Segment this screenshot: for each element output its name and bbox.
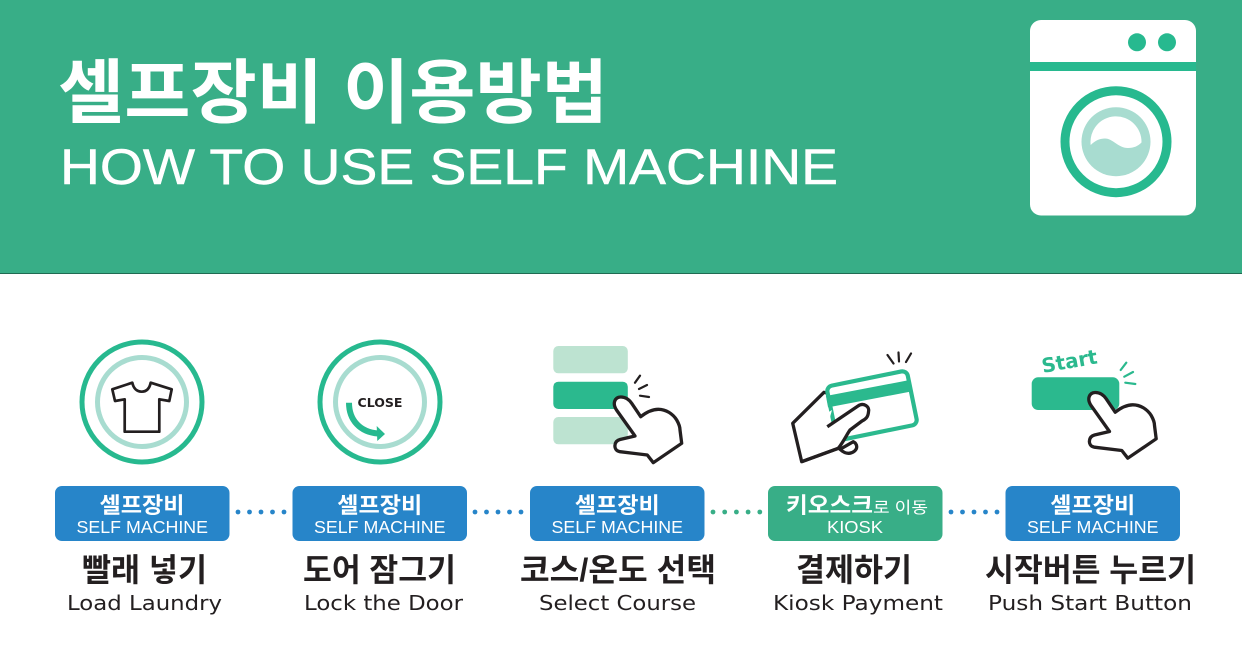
label: step 5 self machine xyxy=(1006,486,1180,541)
icon: door close arrow in circle: CLOSE xyxy=(358,396,402,410)
label: step 3 self machine xyxy=(530,486,704,541)
label: step 3 self machine: SELF MACHINE xyxy=(552,517,683,537)
connector dots 3 xyxy=(711,510,762,514)
label: step 2 self machine: SELF MACHINE xyxy=(314,517,446,537)
step 3 text: 코스/온도 선택 xyxy=(520,552,716,588)
label: step 4 kiosk: 로 이동 xyxy=(873,499,928,517)
label: step 4 kiosk: KIOSK xyxy=(827,517,883,537)
label: step 2 self machine: 셀프장비 xyxy=(337,493,422,518)
step 5 text: Push Start Button xyxy=(988,591,1192,615)
step 5 text xyxy=(985,552,1196,615)
connector dots 4 xyxy=(949,510,999,514)
step 1 text: 빨래 넣기 xyxy=(82,552,207,588)
icon: door close arrow in circle xyxy=(320,342,440,462)
icon: start button with hand xyxy=(1032,344,1156,458)
label: step 1 self machine: 셀프장비 xyxy=(100,493,184,518)
subtitle: HOW TO USE SELF MACHINE xyxy=(60,139,838,195)
label: step 5 self machine: SELF MACHINE xyxy=(1027,517,1158,537)
label: step 1 self machine: SELF MACHINE xyxy=(76,517,208,537)
step 4 text xyxy=(773,552,943,615)
connector dots 1 xyxy=(236,510,286,514)
title: 셀프장비 이용방법 xyxy=(58,54,608,132)
step 2 text xyxy=(303,552,464,615)
icon: course selection with hand xyxy=(553,346,682,463)
label: step 5 self machine: 셀프장비 xyxy=(1050,493,1135,518)
step 2 text: 도어 잠그기 xyxy=(303,552,456,588)
label: step 4 kiosk: 키오스크 xyxy=(786,493,873,518)
step 5 text: 시작버튼 누르기 xyxy=(985,552,1196,588)
step 3 text xyxy=(520,552,716,615)
step 4 text: Kiosk Payment xyxy=(773,591,943,615)
connector dots 2 xyxy=(473,510,523,514)
step 3 text: Select Course xyxy=(539,591,696,615)
step 1 text: Load Laundry xyxy=(67,591,222,615)
label: step 4 kiosk xyxy=(768,486,942,541)
label: step 1 self machine xyxy=(55,486,230,541)
label: step 3 self machine: 셀프장비 xyxy=(575,493,660,518)
header banner xyxy=(0,0,1242,274)
label: step 2 self machine xyxy=(292,486,467,541)
step 1 text xyxy=(67,552,222,615)
icon: start button with hand: Start xyxy=(1040,344,1099,378)
step 4 text: 결제하기 xyxy=(796,552,912,588)
icon: washing machine xyxy=(1030,20,1196,216)
step 2 text: Lock the Door xyxy=(304,591,464,615)
icon: t-shirt in circle xyxy=(82,342,202,462)
icon: hand holding payment card xyxy=(793,352,918,462)
